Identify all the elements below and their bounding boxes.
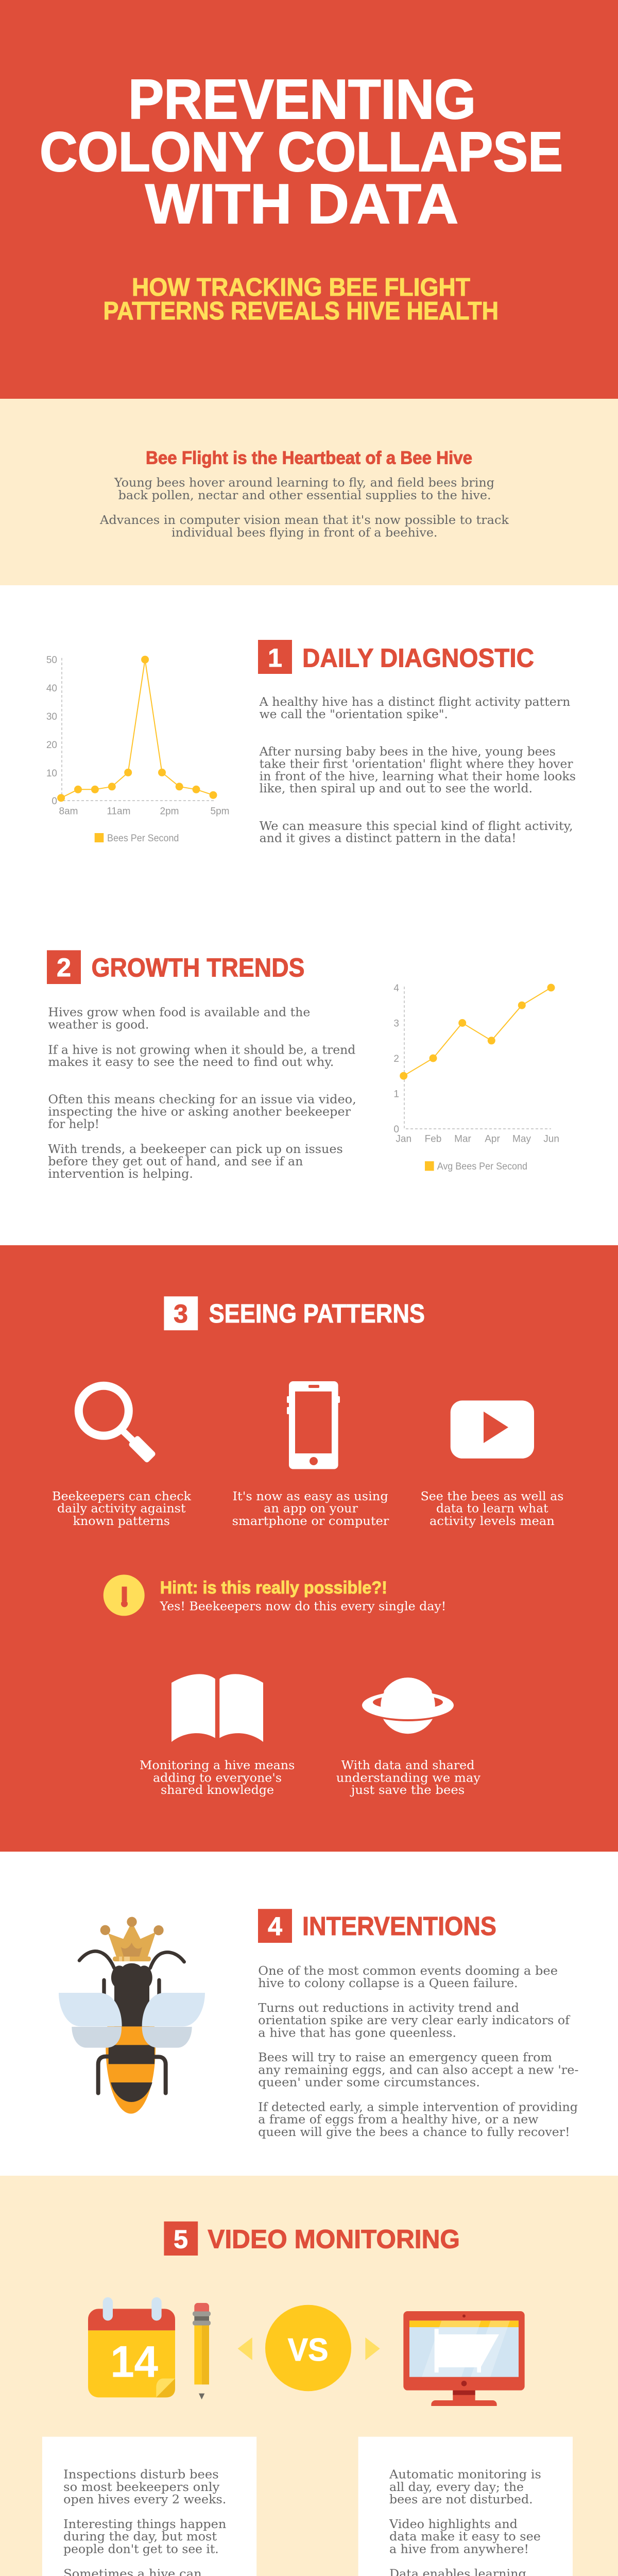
chart: bees per second: 5pm — [211, 806, 229, 817]
card: inspections: open hives every 2 weeks. — [63, 2493, 226, 2506]
chart: avg bees per second: 1 — [393, 1089, 399, 1100]
card: automatic monitoring: all day, every day; the — [389, 2481, 524, 2494]
icon: planet — [360, 1677, 455, 1734]
heading: seeing patterns: 3 — [174, 1299, 188, 1328]
chart: avg bees per second: Avg Bees Per Second — [437, 1161, 527, 1172]
icon: calendar: 14 — [110, 2337, 158, 2386]
heading: interventions: INTERVENTIONS — [302, 1911, 496, 1941]
text: growth trends — [48, 1006, 356, 1181]
intro heading: Bee Flight is the Heartbeat of a Bee Hive — [146, 448, 472, 468]
caption: app: smartphone or computer — [232, 1515, 389, 1528]
chart: bees per second: 30 — [46, 711, 57, 722]
chart: avg bees per second: Jun — [543, 1134, 559, 1145]
heading: interventions — [258, 1909, 496, 1943]
icon: vs badge: VS — [288, 2332, 329, 2368]
heading: video monitoring: VIDEO MONITORING — [208, 2224, 460, 2253]
heading: seeing patterns: SEEING PATTERNS — [209, 1299, 425, 1328]
caption: shared knowledge: shared knowledge — [161, 1784, 274, 1797]
text: interventions: One of the most common events dooming a bee — [258, 1964, 558, 1978]
icon: calendar — [88, 2297, 175, 2397]
icon: video play — [451, 1400, 534, 1459]
caption: save the bees — [336, 1759, 480, 1797]
card: automatic monitoring: Video highlights and — [389, 2518, 518, 2531]
text: growth trends: weather is good. — [48, 1019, 149, 1032]
text: interventions: a frame of eggs from a healthy hive, or a new — [258, 2113, 539, 2127]
caption: app: It's now as easy as using — [233, 1490, 388, 1503]
caption: shared knowledge: Monitoring a hive means — [140, 1759, 295, 1772]
text: interventions: hive to colony collapse is a Queen failure. — [258, 1977, 518, 1990]
heading: seeing patterns — [164, 1296, 425, 1330]
text: interventions: orientation spike are very clear early indicators of — [258, 2014, 570, 2027]
heading: video monitoring: 5 — [174, 2225, 188, 2253]
heading: daily diagnostic — [258, 640, 534, 674]
caption: shared knowledge — [140, 1759, 295, 1797]
text: growth trends: for help! — [48, 1118, 99, 1131]
chart: bees per second: 20 — [46, 740, 57, 751]
text: interventions: any remaining eggs, and can also accept a new 're- — [258, 2063, 579, 2077]
text: growth trends: With trends, a beekeeper can pick up on issues — [48, 1143, 343, 1156]
caption: shared knowledge: adding to everyone's — [153, 1771, 282, 1785]
icon: magnifier — [79, 1386, 157, 1463]
heading: growth trends: 2 — [57, 953, 71, 982]
caption: see bees: See the bees as well as — [421, 1490, 563, 1503]
intro text: Young bees hover around learning to fly, and field bees bring — [114, 477, 494, 490]
icon: monitor — [403, 2311, 525, 2406]
intro text: individual bees flying in front of a beehive. — [171, 526, 438, 539]
card: automatic monitoring: bees are not disturbed. — [389, 2493, 533, 2506]
text: interventions: Turns out reductions in activity trend and — [258, 2002, 519, 2015]
text: interventions: Bees will try to raise an emergency queen from — [258, 2051, 552, 2064]
text: daily diagnostic: in front of the hive, learning what their home looks — [260, 770, 576, 783]
text: growth trends: inspecting the hive or asking another beekeeper — [48, 1106, 351, 1119]
card: automatic monitoring: data make it easy to see — [389, 2530, 541, 2544]
chart: avg bees per second: Mar — [454, 1134, 472, 1145]
intro text: back pollen, nectar and other essential supplies to the hive. — [118, 489, 491, 502]
chart: bees per second: 40 — [46, 683, 57, 694]
chart: avg bees per second — [393, 983, 559, 1172]
caption: see bees: activity levels mean — [430, 1515, 555, 1528]
chart: avg bees per second: May — [512, 1134, 531, 1145]
title: PREVENTING — [128, 68, 476, 131]
text: daily diagnostic: we call the "orientation spike". — [260, 708, 448, 721]
text: growth trends: Hives grow when food is available and the — [48, 1006, 310, 1020]
chart: avg bees per second: Apr — [485, 1134, 500, 1145]
text: interventions: If detected early, a simple intervention of providing — [258, 2101, 578, 2114]
text: interventions — [258, 1964, 579, 2139]
card: automatic monitoring: Automatic monitoring is — [389, 2468, 541, 2482]
icon: vs badge — [238, 2305, 380, 2391]
chart: bees per second: 10 — [46, 768, 57, 779]
heading: growth trends — [47, 950, 305, 984]
panel: seeing patterns — [0, 1245, 618, 1852]
callout: hint: Yes! Beekeepers now do this every single day! — [160, 1600, 446, 1614]
panel: video monitoring — [0, 2176, 618, 2576]
icon: smartphone — [287, 1381, 340, 1469]
card: automatic monitoring — [358, 2437, 573, 2576]
heading: daily diagnostic: 1 — [268, 643, 282, 672]
chart: bees per second: 8am — [59, 806, 78, 817]
chart: avg bees per second: 0 — [393, 1124, 399, 1135]
heading: interventions: 4 — [268, 1912, 282, 1941]
panel: header — [0, 0, 618, 399]
caption: save the bees: just save the bees — [350, 1784, 465, 1797]
intro text: Advances in computer vision mean that it's now possible to track — [99, 514, 509, 527]
text: growth trends: Often this means checking for an issue via video, — [48, 1093, 356, 1107]
card: inspections: people don't get to see it. — [63, 2543, 219, 2556]
text: interventions: a hive that has gone queenless. — [258, 2026, 456, 2040]
chart: avg bees per second: 2 — [393, 1054, 399, 1064]
text: interventions: queen will give the bees a chance to fully recover! — [258, 2126, 570, 2139]
chart: bees per second: Bees Per Second — [107, 833, 179, 844]
card: automatic monitoring: a hive from anywhere! — [389, 2543, 529, 2556]
caption: check activity: daily activity against — [57, 1502, 186, 1516]
icon: open book — [171, 1674, 263, 1742]
card: inspections: so most beekeepers only — [63, 2481, 219, 2494]
chart: bees per second: 50 — [46, 655, 57, 666]
caption: see bees — [421, 1490, 563, 1528]
heading: growth trends: GROWTH TRENDS — [92, 953, 305, 982]
chart: avg bees per second: Feb — [425, 1134, 441, 1145]
text: growth trends: If a hive is not growing when it should be, a trend — [48, 1043, 356, 1057]
subtitle: PATTERNS REVEALS HIVE HEALTH — [103, 297, 499, 325]
subtitle — [103, 274, 499, 325]
panel: intro — [0, 399, 618, 585]
heading: daily diagnostic: DAILY DIAGNOSTIC — [302, 643, 534, 672]
card: inspections — [42, 2437, 256, 2576]
title — [40, 68, 563, 235]
card: inspections: Interesting things happen — [63, 2518, 226, 2531]
caption: app: an app on your — [264, 1502, 358, 1516]
icon: exclamation hint — [104, 1574, 145, 1616]
subtitle: HOW TRACKING BEE FLIGHT — [132, 274, 470, 301]
caption: check activity — [52, 1490, 192, 1528]
caption: save the bees: With data and shared — [341, 1759, 475, 1772]
icon: pencil — [193, 2303, 211, 2399]
caption: see bees: data to learn what — [436, 1502, 548, 1516]
text: daily diagnostic: like, then spiral up and out to see the world. — [260, 782, 533, 795]
text: daily diagnostic: and it gives a distinct pattern in the data! — [260, 832, 517, 845]
text: daily diagnostic: After nursing baby bees in the hive, young bees — [259, 745, 556, 758]
caption: save the bees: understanding we may — [336, 1771, 480, 1785]
intro text — [99, 477, 509, 539]
text: daily diagnostic: We can measure this special kind of flight activity, — [260, 820, 573, 833]
caption: check activity: Beekeepers can check — [52, 1490, 192, 1503]
chart: bees per second — [46, 655, 229, 844]
chart: bees per second: 11am — [107, 806, 130, 817]
title: WITH DATA — [145, 173, 458, 235]
text: daily diagnostic: take their first 'orientation' flight where they hover — [260, 757, 573, 771]
text: daily diagnostic — [259, 696, 576, 845]
chart: bees per second: 2pm — [160, 806, 179, 817]
callout: hint — [160, 1578, 446, 1614]
chart: avg bees per second: 3 — [393, 1018, 399, 1029]
text: daily diagnostic: A healthy hive has a distinct flight activity pattern — [259, 696, 571, 709]
card: inspections: during the day, but most — [63, 2530, 217, 2544]
title: COLONY COLLAPSE — [40, 121, 563, 183]
chart: avg bees per second: Jan — [396, 1134, 411, 1145]
chart: bees per second: 0 — [52, 796, 57, 807]
callout: hint: Hint: is this really possible?! — [160, 1578, 387, 1598]
caption: check activity: known patterns — [73, 1515, 170, 1528]
chart: avg bees per second: 4 — [393, 983, 399, 994]
text: growth trends: makes it easy to see the need to find out why. — [48, 1056, 334, 1069]
caption: app — [232, 1490, 389, 1528]
text: growth trends: intervention is helping. — [48, 1167, 193, 1181]
text: interventions: queen' under some circumstances. — [258, 2076, 480, 2090]
icon: queen bee — [59, 1917, 205, 2114]
text: growth trends: before they get out of hand, and see if an — [48, 1155, 303, 1168]
card: inspections: Inspections disturb bees — [63, 2468, 219, 2482]
